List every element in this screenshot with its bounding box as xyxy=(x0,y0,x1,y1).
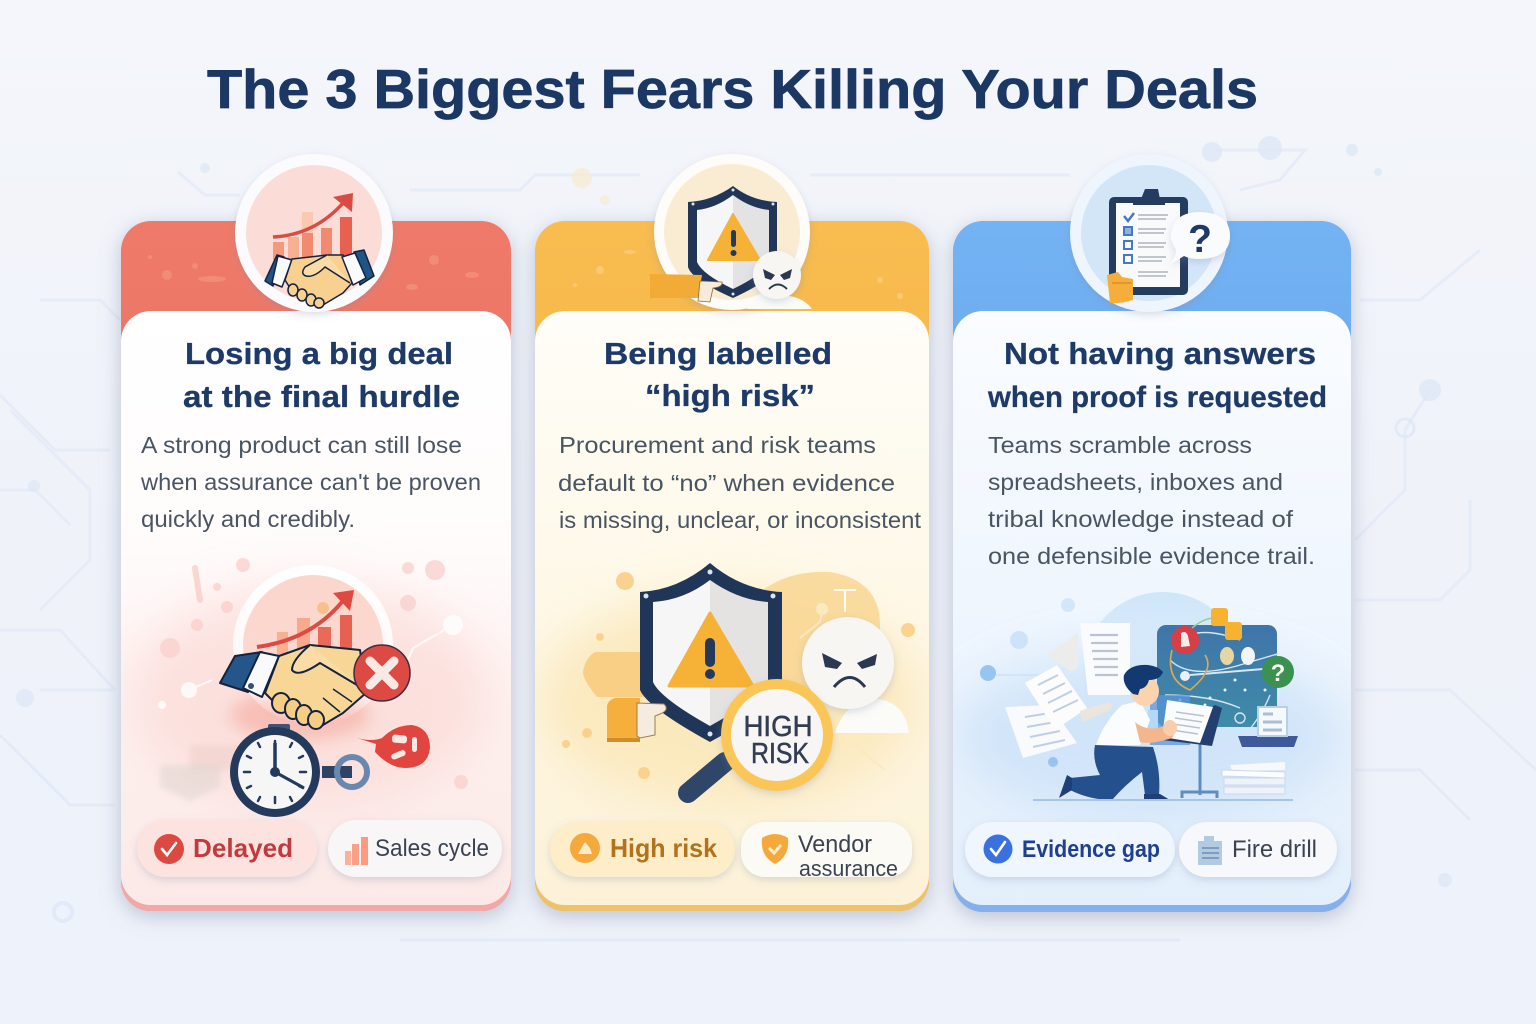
card base and amber header xyxy=(535,221,929,911)
title: The 3 Biggest Fears Killing Your Deals xyxy=(207,58,1258,120)
heading: Losing a big deal xyxy=(185,336,453,371)
chip: vendor assurance: Vendor xyxy=(798,831,872,858)
body text: A strong product can still lose xyxy=(141,432,462,458)
heading: when proof is requested xyxy=(987,381,1327,414)
body text: Procurement and risk teams xyxy=(559,432,876,458)
illustration: shield, frowning face, magnifier xyxy=(540,563,920,805)
body text xyxy=(558,432,922,533)
heading: Not having answers xyxy=(1004,336,1316,371)
body text: tribal knowledge instead of xyxy=(988,506,1294,532)
chip: fire drill xyxy=(1179,822,1337,877)
icon: clipboard, folder, question bubble xyxy=(1070,154,1230,312)
heading: Being labelled xyxy=(604,336,832,371)
panel: fear 3, no answers when proof requested xyxy=(953,154,1351,912)
heading xyxy=(987,336,1327,414)
chip: high risk: High risk xyxy=(610,833,718,863)
icon: shield warning and frowning face xyxy=(650,154,812,310)
illustration: handshake failing, stopwatch xyxy=(130,558,490,817)
chip: delayed xyxy=(137,820,317,877)
body text xyxy=(140,432,481,532)
heading xyxy=(183,336,460,414)
card base and blue header xyxy=(953,221,1351,912)
body text: is missing, unclear, or inconsistent xyxy=(559,507,922,533)
chip: sales cycle xyxy=(328,820,502,877)
illustration: shield, frowning face, magnifier: HIGH xyxy=(744,711,812,743)
chip: vendor assurance xyxy=(741,822,912,881)
illustration: shield, frowning face, magnifier: RISK xyxy=(751,738,810,770)
body text: spreadsheets, inboxes and xyxy=(988,469,1283,495)
panel: fear 2, labelled high risk xyxy=(535,154,929,911)
body text: default to “no” when evidence xyxy=(558,470,895,496)
body text: one defensible evidence trail. xyxy=(988,543,1315,569)
chip: high risk xyxy=(550,822,735,877)
icon: handshake with rising chart xyxy=(235,154,393,312)
body text: Teams scramble across xyxy=(988,432,1252,458)
icon: clipboard, folder, question bubble: ? xyxy=(1188,218,1212,261)
chip: sales cycle: Sales cycle xyxy=(375,835,489,862)
body text: quickly and credibly. xyxy=(141,506,355,532)
panel: fear 1, losing a big deal xyxy=(121,154,511,911)
chip: fire drill: Fire drill xyxy=(1232,836,1317,863)
illustration: person with scattered documents and evidence board xyxy=(955,592,1345,820)
card base and red header xyxy=(121,221,511,911)
heading xyxy=(604,336,832,413)
chip: evidence gap xyxy=(965,822,1175,877)
chip: vendor assurance: assurance xyxy=(799,856,898,881)
chip: evidence gap: Evidence gap xyxy=(1022,836,1160,863)
body text xyxy=(988,432,1315,569)
body text: when assurance can't be proven xyxy=(140,469,481,495)
chip: delayed: Delayed xyxy=(193,833,293,863)
heading: at the final hurdle xyxy=(183,379,460,414)
illustration: person with scattered documents and evidence board: ? xyxy=(1271,660,1285,687)
heading: “high risk” xyxy=(645,378,815,413)
